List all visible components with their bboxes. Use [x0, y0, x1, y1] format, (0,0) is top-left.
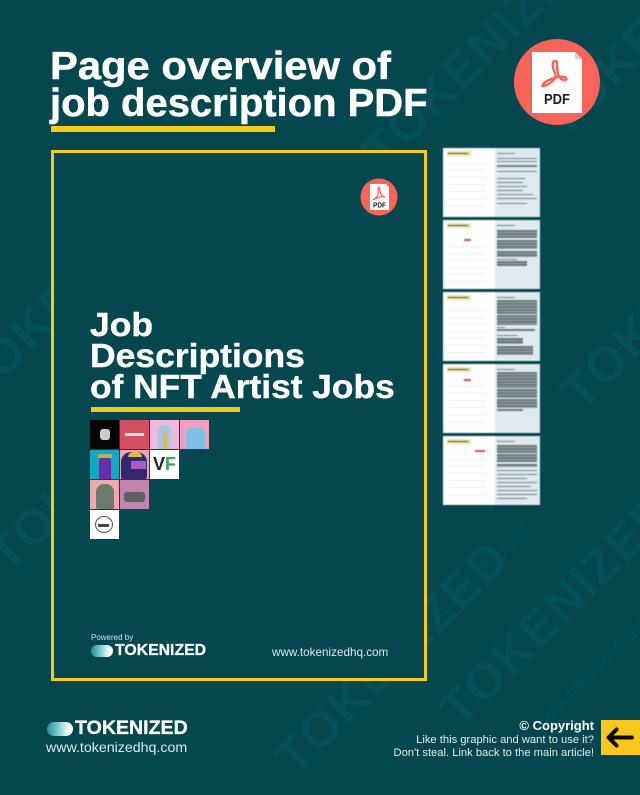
- icon: back arrow: [601, 720, 640, 755]
- title: [49, 45, 428, 125]
- thumbnail pages: [442, 147, 541, 506]
- background watermark: TOKENIZED: [264, 529, 520, 785]
- cover heading: of NFT Artist Jobs: [90, 368, 395, 405]
- tile: purple figure: [90, 450, 119, 479]
- background watermark: www.tokenizedhq.com: [321, 344, 455, 477]
- icon: PDF badge: [514, 39, 600, 125]
- footer logo: TOKENIZED: [75, 718, 188, 739]
- cover heading underline: [91, 407, 240, 412]
- tile: pink character: [150, 420, 179, 449]
- tile: VF logo: VF: [153, 454, 176, 474]
- copyright notice: Like this graphic and want to use it?: [416, 734, 594, 746]
- copyright notice: © Copyright: [519, 718, 594, 733]
- cover website: www.tokenizedhq.com: [272, 646, 388, 659]
- tile: white skull: [90, 510, 119, 539]
- copyright notice: Don't steal. Link back to the main article!: [393, 747, 594, 759]
- title: Page overview of: [50, 45, 391, 88]
- panel: document cover: [51, 150, 427, 681]
- cover heading: Descriptions: [90, 337, 305, 374]
- page thumbnail 2: [443, 220, 540, 289]
- page thumbnail 5: [443, 436, 540, 505]
- page thumbnail 3: [443, 292, 540, 361]
- cover heading: Job: [90, 306, 153, 343]
- tile: blue cat: [180, 420, 209, 449]
- tile: VF logo: [150, 450, 179, 479]
- background watermark: www.tokenizedhq.com: [399, 520, 533, 654]
- icon: PDF badge: PDF: [544, 91, 570, 108]
- footer website: www.tokenizedhq.com: [46, 740, 187, 756]
- tile: ape: [120, 450, 149, 479]
- page thumbnail 4: [443, 364, 540, 433]
- tile: mauve robot: [120, 480, 149, 509]
- page thumbnail 1: [443, 148, 540, 217]
- powered by label: Powered by: [91, 633, 133, 642]
- cover logo: TOKENIZED: [115, 642, 206, 659]
- icon: small PDF badge: PDF: [373, 200, 386, 210]
- title underline: [51, 126, 275, 132]
- cover heading: [90, 306, 395, 405]
- tile: red logo: [120, 420, 149, 449]
- copyright notice: [393, 718, 594, 759]
- tile: grey character: [90, 480, 119, 509]
- NFT logo grid: [90, 420, 209, 539]
- icon: small PDF badge: [360, 178, 398, 216]
- tile: black logo: [90, 420, 119, 449]
- title: job description PDF: [50, 82, 428, 125]
